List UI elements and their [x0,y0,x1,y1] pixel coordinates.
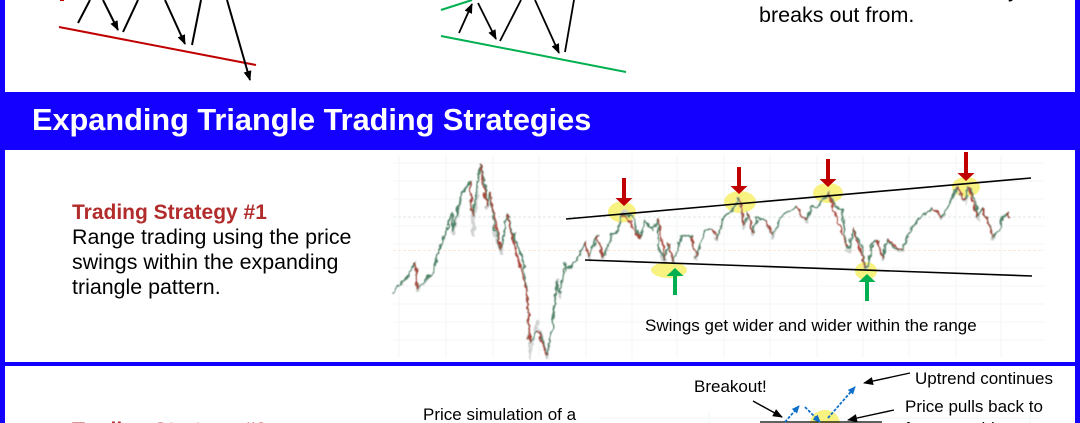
price chart: range trading [393,152,1044,358]
breakout diagram: Price pulls back to [905,397,1043,416]
price series [393,165,1010,358]
breakout diagram: Uptrend continues [915,369,1053,388]
expanding triangle trend lines [566,178,1032,276]
chart caption: Swings get wider and wider within the range [645,316,977,335]
description text fragment: breaks out from. [759,3,914,27]
bullish expanding triangle diagram [441,0,626,72]
strategy 1 text block: Trading Strategy #1 [72,201,267,224]
strategy 1 text block: swings within the expanding [72,250,338,274]
breakout diagram [600,369,1053,423]
section header band [0,92,1080,150]
breakout diagram: Breakout! [694,377,767,396]
red down arrows [616,152,974,206]
blue frame right [1075,0,1080,423]
bearish expanding triangle diagram [59,0,256,80]
strategy 1 text block [72,201,351,299]
blue frame left [0,0,5,423]
section header band: Expanding Triangle Trading Strategies [32,102,591,137]
strategy 1 text block: Range trading using the price [72,225,351,249]
strategy 1 text block: triangle pattern. [72,275,221,299]
description text fragment [759,0,1019,27]
highlight ellipses [608,177,980,280]
green up arrows [666,268,876,301]
divider band [0,362,1080,366]
